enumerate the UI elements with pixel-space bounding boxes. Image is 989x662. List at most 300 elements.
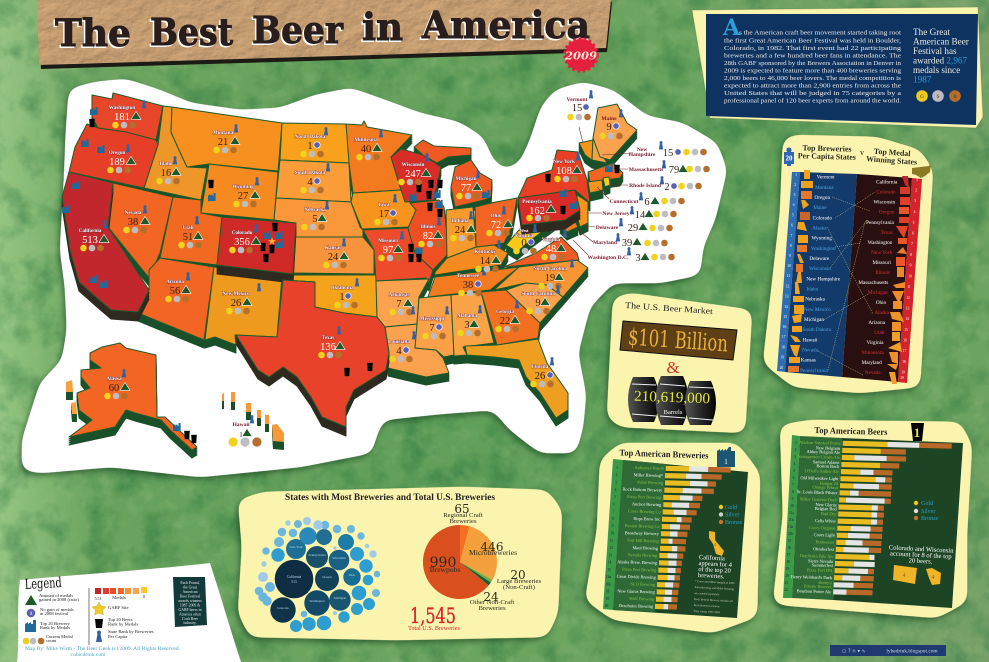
right ranking: medal winning states: 11 <box>907 285 911 289</box>
medals awarded callout: G <box>920 95 924 100</box>
beer bars: Bud Dry <box>821 511 837 516</box>
footnotes: are counted separately <box>694 592 720 596</box>
state label: Washington: Washington <box>109 105 135 111</box>
state label: Arkansas <box>388 292 415 315</box>
right ranking: medal winning states: Maryland <box>862 360 882 366</box>
bubble chart: Washington <box>309 599 325 603</box>
legend: triangle <box>25 593 79 605</box>
intro paragraph: 28th GABF sponsored by the Brewers Association in Denver in <box>724 60 902 67</box>
title: America <box>421 3 590 47</box>
right ranking: medal winning states: 13 <box>906 306 910 310</box>
left ranking: breweries per capita: New Mexico <box>804 307 831 313</box>
beer bars: New Belgium <box>816 445 841 451</box>
state label: New Hampshire: 15 <box>663 148 673 159</box>
state label: Washington D.C.: Washington D.C. <box>588 255 629 261</box>
rank numbers: 1 <box>616 466 618 470</box>
brewery bars: Alaska Brew. Brewing <box>617 559 658 565</box>
legend: triangle: gained in 2008 (ratio) <box>39 597 79 602</box>
state label: Connecticut: Connecticut <box>610 199 639 205</box>
left ranking: breweries per capita: 12 <box>786 284 790 288</box>
state label: Georgia: Georgia <box>496 309 514 315</box>
state label: Montana: 21 <box>218 137 228 148</box>
legend: medals: Current Medal <box>46 634 74 639</box>
intro paragraph: 2,000 beers to 46,000 beer lovers. The medal competition is <box>724 75 901 82</box>
state label: Washington <box>109 100 146 128</box>
panel: states with most breweries <box>238 487 562 640</box>
state label: New Jersey: 14 <box>635 210 646 221</box>
state label: New Hampshire: New <box>637 147 648 153</box>
legend note box <box>173 577 207 627</box>
right ranking: medal winning states: 8 <box>910 253 912 257</box>
right ranking: medal winning states: California <box>876 179 898 186</box>
state label: Oklahoma: 1 <box>339 292 345 303</box>
panel: legend <box>17 563 241 662</box>
legend: pawn: Per Capita <box>108 634 127 639</box>
right ranking: medal winning states: Texas <box>881 230 893 236</box>
state label: New York <box>553 152 582 182</box>
beer bars: Oktoberfest <box>813 546 835 552</box>
intro paragraph: professional panel of 120 beer experts from around the world. <box>724 98 901 104</box>
left ranking: breweries per capita: 17 <box>782 335 786 339</box>
state label: Texas: Texas <box>322 335 334 341</box>
legend note box: the Great <box>183 586 198 590</box>
state label: Colorado: 356 <box>234 237 250 248</box>
legend heading: Legend <box>24 575 62 593</box>
state label: West Virginia: 0 <box>521 238 527 249</box>
title banner <box>37 0 612 69</box>
beer bars <box>791 440 952 595</box>
state label: Pennsylvania <box>522 199 556 221</box>
state label: Alaska <box>104 369 130 399</box>
state label: Indiana: Indiana <box>451 218 469 224</box>
left ranking: breweries per capita: Montana <box>815 185 834 191</box>
intro paragraph: s the American craft beer movement started taking root <box>739 30 901 36</box>
state label: Ohio: 72 <box>491 220 501 231</box>
California callout: California <box>699 554 725 562</box>
icon: factory <box>717 447 735 467</box>
state label: Missouri <box>378 231 404 261</box>
left ranking: breweries per capita: Nevada <box>802 348 819 354</box>
state label: Utah: Utah <box>183 225 194 231</box>
state label: Mississippi: 7 <box>429 323 435 334</box>
state label: Indiana <box>450 211 476 241</box>
pie labels: 65 <box>454 502 470 516</box>
state label: Vermont: Vermont <box>567 97 588 103</box>
state label: Arizona <box>165 272 191 302</box>
rank numbers: 7 <box>613 510 615 514</box>
beer bars: Bourbon Porter Ale <box>797 588 831 594</box>
brewery bars: Maui Brewing <box>632 545 659 551</box>
state label: Massachusetts: 79 <box>669 165 679 176</box>
state label: South Dakota <box>295 163 330 193</box>
beer bars: St. Louis Black Pilsner <box>797 489 838 495</box>
state label: Idaho: Idaho <box>160 161 173 167</box>
pie labels: Brewpubs <box>430 565 460 574</box>
left ranking: breweries per capita: 5 <box>792 214 794 218</box>
medal legend: Bronze <box>921 516 939 522</box>
state label: Montana <box>213 124 240 153</box>
state label: Colorado <box>229 224 261 253</box>
state label: Florida <box>530 357 554 387</box>
medals awarded callout: awarded 2,967 <box>913 56 968 66</box>
icon: pint number 1: 1 <box>914 425 920 440</box>
legend note box: awards winners <box>178 599 202 603</box>
legend note box: American <box>183 590 198 594</box>
state label: North Dakota <box>295 127 328 157</box>
state label: Washington: 181 <box>114 112 130 123</box>
pie labels: Regional Craft <box>443 512 483 519</box>
icons: Colorado and Wisconsin: 4 <box>902 573 906 579</box>
state label: Minnesota: Minnesota <box>354 137 378 143</box>
left ranking: breweries per capita: 7 <box>791 234 793 238</box>
right ranking: medal winning states: Alaska <box>874 310 890 316</box>
medals awarded callout: B <box>953 95 957 100</box>
left ranking: breweries per capita: 13 <box>785 294 789 298</box>
right ranking: medal winning states: Missouri <box>872 260 891 266</box>
intro paragraph: Colorado, in 1982. That first event had 22 participating <box>724 45 902 52</box>
Colorado and Wisconsin callout: 20 beers. <box>908 557 933 566</box>
state label: New Hampshire <box>629 141 707 159</box>
medal legend: Bronze <box>725 520 743 526</box>
state label: Montana: Montana <box>213 130 233 136</box>
icon: California: 4 <box>714 542 717 547</box>
state label: Iowa: 17 <box>379 209 389 220</box>
state label: North Dakota: North Dakota <box>295 134 326 140</box>
legend: medals: count <box>46 638 57 643</box>
brewery bars: Hops Brew Inc <box>633 516 660 522</box>
state label: Illinois: Illinois <box>420 224 436 230</box>
medal legend: Silver <box>725 512 739 518</box>
beer bars: Alaskan Smoked Porter <box>799 440 841 446</box>
footnotes: Rock Bottom Brewery includes all <box>694 598 733 603</box>
medals awarded callout: The Great <box>913 27 950 37</box>
beer bars: Private Reserve <box>804 584 832 589</box>
footer bar <box>830 645 946 656</box>
state label: Texas <box>318 326 345 358</box>
rank numbers: 10 <box>610 532 614 536</box>
right ranking: medal winning states: 7 <box>911 242 913 246</box>
state label: Washington D.C.: 3 <box>635 253 641 264</box>
right ranking: medal winning states: Pennsylvania <box>866 220 895 226</box>
rank numbers: 11a <box>789 511 794 515</box>
legend: factory: Rank by Medals <box>40 625 70 630</box>
state label: Michigan: 77 <box>461 183 471 194</box>
state label: Delaware: 29 <box>628 223 638 234</box>
state label: Virginia: 48 <box>546 244 556 255</box>
beer bars: Henry Weinhard's Dark <box>791 574 833 580</box>
state label: New Hampshire: Hampshire <box>629 152 656 158</box>
state label: North Carolina: 19 <box>545 273 555 284</box>
rank numbers: 9 <box>612 524 614 528</box>
medals awarded callout <box>913 27 969 102</box>
rank numbers: 15 <box>788 539 792 543</box>
left ranking: breweries per capita: Colorado <box>813 215 832 221</box>
state label: Nevada <box>123 205 150 233</box>
beer bars: Hangar 24 <box>820 481 839 486</box>
state label: Georgia <box>495 300 520 332</box>
beer bars: Samuel Adams <box>813 459 840 465</box>
icon: factory: 1 <box>724 458 728 466</box>
brewery bars: Miller Brewing* <box>634 472 663 478</box>
rank numbers: 13a <box>788 525 793 529</box>
legend: medal color scale: 513 <box>95 596 102 601</box>
state label: Virginia <box>541 229 567 260</box>
right ranking: medal winning states: Ohio <box>876 300 887 306</box>
footnotes: Rock Bottom locations <box>694 604 720 608</box>
brewery bars: Rock Bottom Brewery <box>622 487 663 493</box>
beer bars: Orange Wheat <box>812 484 839 490</box>
beer bars: Summerfest <box>812 562 834 568</box>
heading: top medal winners: Top Medal <box>873 147 912 158</box>
state label: New Jersey <box>602 206 677 221</box>
rank numbers: 1 <box>795 441 797 445</box>
legend: triangle: Amount of medals <box>39 593 73 598</box>
state label: Connecticut <box>610 192 685 208</box>
title: The <box>55 11 131 55</box>
legend: circle: 0 <box>30 612 33 617</box>
brewery bars: Pabst Brewing <box>637 480 664 485</box>
pie labels: Large Breweries <box>497 578 542 585</box>
footnotes: Pabst Brewing and Miller Brewing <box>695 586 734 591</box>
brewery bars: Pizza Port Brewing <box>622 567 657 573</box>
right ranking: medal winning states: 5 <box>913 221 915 225</box>
state label: Vermont <box>567 90 593 120</box>
rank numbers: 10 <box>790 504 794 508</box>
state label: Alabama: Alabama <box>457 313 477 319</box>
state label: South Dakota: South Dakota <box>295 170 326 176</box>
year badge 2009 <box>564 39 597 71</box>
state label: Rhode Island: Rhode Island <box>629 183 662 189</box>
state label: Ohio <box>486 206 513 236</box>
left ranking: breweries per capita: 8 <box>790 244 792 248</box>
left ranking: breweries per capita: 4 <box>793 203 795 207</box>
legend note box: GABF beers in <box>178 608 202 612</box>
rank numbers: 19 <box>786 567 790 571</box>
heading: most breweries: States with Most Breweries and Total U.S. Breweries <box>285 492 495 502</box>
state label: Texas: 136 <box>320 342 336 353</box>
legend note box: America often <box>179 612 201 616</box>
state label: West Virginia: Virginia <box>515 233 534 239</box>
right ranking: medal winning states: Michigan <box>868 290 888 296</box>
state label: Oregon: Oregon <box>109 150 125 156</box>
state label: Nevada: 38 <box>128 217 138 228</box>
state label: Connecticut: 6 <box>644 197 650 208</box>
rank numbers: 16a <box>606 575 611 579</box>
footer bar: ○ ? ∩ ▾ ∿ <box>842 648 866 654</box>
state label: South Carolina <box>521 285 560 314</box>
left ranking: breweries per capita: Wisconsin <box>809 266 831 272</box>
medal legend <box>719 505 743 526</box>
beer bars: Sierra Nevada <box>808 558 833 564</box>
legend: pint: Top 20 Beers <box>108 617 133 622</box>
rank numbers: 9 <box>792 497 794 501</box>
state label: California: 513 <box>82 235 98 246</box>
right ranking: medal winning states: 9 <box>910 264 912 268</box>
right ranking: medal winning states: 20 <box>900 376 904 380</box>
footnotes: Total counts 1987-2009 <box>693 610 721 614</box>
state label: Florida: Florida <box>532 364 549 370</box>
left ranking: breweries per capita: 9 <box>789 254 791 258</box>
beer bars: Old Milwaukee Light <box>800 475 839 481</box>
legend: pawn <box>96 629 154 642</box>
rank numbers: 17 <box>787 553 790 557</box>
brewery bars: Anchor Brewing <box>632 501 662 507</box>
beer bars: Budweiser <box>816 539 835 545</box>
sign: $101 Billion <box>620 321 737 360</box>
state label: Nebraska: Nebraska <box>304 207 326 213</box>
rank numbers <box>784 441 797 592</box>
state label: Illinois: 82 <box>423 231 433 242</box>
right ranking: medal winning states: 1 <box>916 178 918 182</box>
left ranking: breweries per capita: Maine <box>813 205 827 211</box>
state label: North Carolina <box>533 259 574 289</box>
California callout: breweries. <box>698 572 725 580</box>
legend: circle <box>27 607 74 617</box>
state label: Pennsylvania: 162 <box>529 206 545 217</box>
state label: Maine: 9 <box>606 122 612 133</box>
state label: Alabama: 3 <box>464 320 470 331</box>
bubble chart: Oregon <box>322 575 332 579</box>
bubble chart: Wisconsin <box>332 556 346 560</box>
rank numbers: 20 <box>605 604 608 608</box>
rank numbers: 12 <box>609 546 613 550</box>
left ranking: breweries per capita: 19 <box>780 356 784 360</box>
brewery bars: Coors Brewing Co <box>628 508 662 514</box>
beer bars: Abbey Belgian Ale <box>806 449 840 455</box>
panel: top American breweries <box>585 443 760 633</box>
medal legend: Gold <box>921 501 933 507</box>
left ranking: breweries per capita: Pennsylvania <box>800 368 829 374</box>
state label: Tennessee: Tennessee <box>457 273 480 279</box>
state label: Michigan: Michigan <box>455 176 477 182</box>
bubble chart <box>255 517 380 632</box>
rank numbers <box>605 466 618 608</box>
state label: Alaska: 60 <box>109 383 119 394</box>
legend: circle: No gain of medals <box>40 607 74 612</box>
state label: Ohio: Ohio <box>491 213 502 219</box>
legend: medal color scale <box>95 587 147 601</box>
legend: factory <box>25 620 70 632</box>
state label: Nevada: Nevada <box>125 210 142 216</box>
brewery bars: Boston Brewing Co <box>625 523 661 529</box>
state label: Wyoming: Wyoming <box>232 184 254 190</box>
brewery bars: SLO Brewing <box>630 581 656 587</box>
rank numbers: 13b <box>787 532 793 536</box>
state label: Missouri: 97 <box>383 245 393 256</box>
legend note box: 1987-2009 & <box>180 604 200 608</box>
heading: market: The U.S. Beer Market <box>625 300 714 316</box>
intro paragraph: United States that will be judged in 75 categories by a <box>724 90 901 97</box>
state label: Missouri: Missouri <box>378 238 398 244</box>
heading: top breweries per capita <box>798 143 856 162</box>
right ranking: medal winning states: 17 <box>903 349 906 353</box>
right ranking: medal winning states: 19 <box>901 370 905 374</box>
state label: South Dakota: 4 <box>307 177 313 188</box>
beer bars: O'Dell's Amber Ale <box>805 468 839 474</box>
state label: Maine <box>599 109 623 139</box>
state label: Michigan <box>455 170 482 199</box>
bubble chart: Michigan <box>334 596 347 600</box>
left ranking: breweries per capita: Alaska <box>812 226 827 232</box>
rank numbers: 2 <box>616 473 618 477</box>
title <box>55 3 590 55</box>
heading: top breweries per capita: Top Breweries <box>802 143 852 154</box>
pie labels: 24 <box>483 590 499 604</box>
legend note box: Craft Beer <box>182 617 199 621</box>
state label: Wisconsin: 247 <box>405 169 421 180</box>
rank numbers: 6 <box>793 476 795 480</box>
panel: U.S. beer market <box>607 293 752 433</box>
left ranking: breweries per capita: New Hampshire <box>806 276 841 282</box>
state label: Alaska: Alaska <box>106 376 122 382</box>
state label: North Dakota: 1 <box>307 141 313 152</box>
left ranking: breweries per capita: Nebraska <box>805 297 825 303</box>
left ranking: breweries per capita: Washington <box>811 246 836 252</box>
medals awarded callout: 1987 <box>913 74 932 84</box>
heading: top medal winners <box>866 146 918 167</box>
medals awarded callout: S <box>937 95 940 100</box>
panel: festival intro <box>692 7 983 128</box>
barrels with barrel count: 210,619,000 <box>634 389 710 407</box>
state label: North Carolina: North Carolina <box>533 266 567 272</box>
brewery bars: Great Divide Brewing <box>617 574 657 580</box>
beer bars: Celis White <box>815 518 836 524</box>
legend: circle: at 2008 festival <box>40 611 69 616</box>
state label: Kansas <box>323 238 349 268</box>
right ranking: medal winning states: Washington <box>868 240 893 246</box>
legend: medals <box>23 634 74 644</box>
beer bars: Belgian Red <box>815 506 837 511</box>
left ranking: breweries per capita: Kansas <box>801 358 816 364</box>
state label: Maryland: Maryland <box>593 240 618 246</box>
state label: Kansas: 24 <box>328 252 339 263</box>
California callout: of the top 20 <box>698 566 731 575</box>
bubble chart: Pennsylvania <box>308 553 326 557</box>
right ranking: medal winning states: Oregon <box>879 210 895 216</box>
state label: Massachusetts: Massachusetts <box>629 167 664 173</box>
state label: Maryland: 39 <box>622 238 632 249</box>
brewery bars: Fort Hill Brewing <box>627 538 660 543</box>
map credit <box>25 645 181 658</box>
rank numbers: 11 <box>610 539 613 543</box>
left ranking: breweries per capita: Vermont <box>817 175 835 181</box>
left ranking: breweries per capita: 2 <box>794 183 796 187</box>
brewery bars: Deschutes Brewing <box>619 603 654 609</box>
rank numbers: 19 <box>605 597 609 601</box>
Colorado and Wisconsin callout <box>888 544 954 567</box>
rank numbers: 4 <box>615 488 617 492</box>
state label: Indiana: 24 <box>455 225 466 236</box>
state label: Idaho: 16 <box>161 168 171 179</box>
rank numbers: 15 <box>607 568 611 572</box>
state label: Iowa <box>374 194 398 225</box>
legend note box: Beer Festival <box>180 594 200 598</box>
state label: Kansas: Kansas <box>325 245 341 251</box>
rank numbers: 8 <box>792 490 794 494</box>
legend: pint <box>95 617 138 628</box>
right ranking: medal winning states: New York <box>871 250 893 256</box>
ranking table background <box>777 172 922 383</box>
panel: per capita vs medal winners <box>763 135 933 393</box>
footnotes: * Coors and Miller merged in 2008 <box>695 580 735 585</box>
beer bars: Deschutes Pale Ale <box>800 553 834 559</box>
state label: Maryland <box>593 233 668 249</box>
footnotes <box>693 580 735 615</box>
table background <box>783 435 963 608</box>
right ranking: medal winning states: Illinois <box>875 270 890 276</box>
left ranking: breweries per capita: 16 <box>783 325 786 329</box>
beer bars: New Glarus <box>816 502 837 507</box>
